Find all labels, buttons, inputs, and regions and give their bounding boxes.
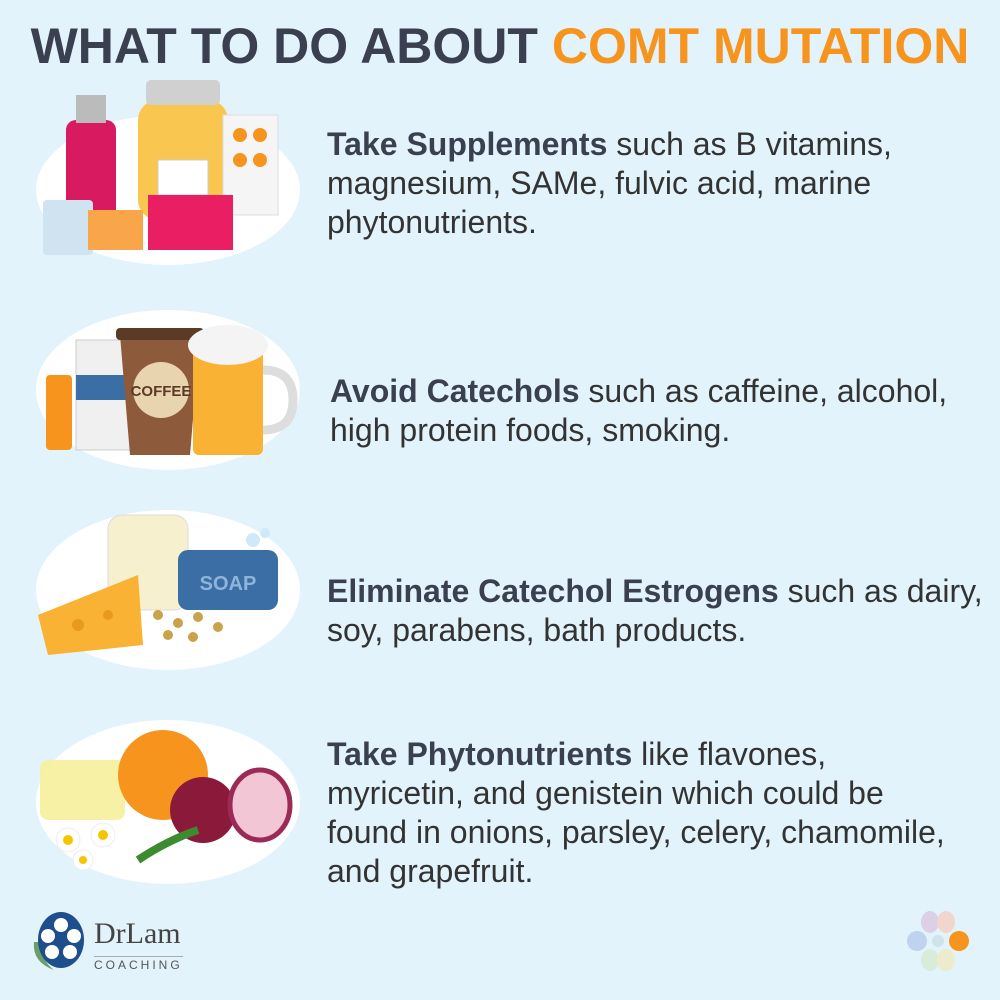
title: WHAT TO DO ABOUT COMT MUTATION: [31, 18, 969, 74]
text: catechols: [330, 373, 947, 448]
text: phytonutrients: and grapefruit.: [327, 853, 533, 889]
text: phytonutrients: found in onions, parsley, celery, chamomile,: [327, 814, 945, 850]
illustration: catechols: [36, 310, 300, 470]
logo: DrLam Coaching: COACHING: [94, 958, 183, 972]
illustration: catechols: COFFEE: [131, 383, 191, 400]
logo: DrLam Coaching: DrLam: [94, 917, 181, 950]
text: supplements: Take Supplements such as B vitamins,: [327, 126, 892, 162]
text: catechols: Avoid Catechols such as caffeine, alcohol,: [330, 373, 947, 409]
text: phytonutrients: [327, 736, 945, 889]
illustration: estrogens: SOAP: [200, 573, 256, 595]
text: phytonutrients: Take Phytonutrients like flavones,: [327, 736, 826, 772]
text: catechols: high protein foods, smoking.: [330, 412, 730, 448]
illustration: estrogens: [36, 510, 300, 670]
illustration: phytonutrients: [36, 720, 300, 884]
icon: flower: [907, 911, 969, 971]
text: estrogens: soy, parabens, bath products.: [327, 612, 746, 648]
text: estrogens: Eliminate Catechol Estrogens such as dairy,: [327, 573, 983, 609]
text: phytonutrients: myricetin, and genistein which could be: [327, 775, 884, 811]
text: estrogens: [327, 573, 983, 648]
text: supplements: phytonutrients.: [327, 204, 537, 240]
logo: DrLam Coaching: [34, 912, 183, 972]
text: supplements: magnesium, SAMe, fulvic acid, marine: [327, 165, 871, 201]
text: supplements: [327, 126, 892, 240]
illustration: supplements: [36, 80, 300, 265]
